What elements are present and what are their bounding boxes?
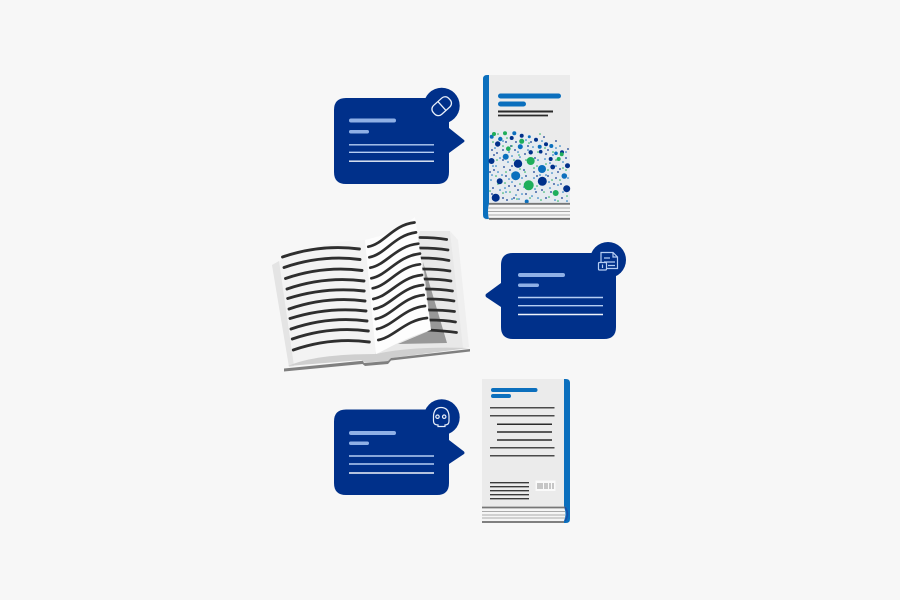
back cover text lines: [490, 408, 554, 456]
back cover pages: [482, 507, 568, 522]
icon: robot head: [434, 408, 449, 426]
book title bars: [498, 94, 561, 116]
callout: top with pill icon: [334, 88, 464, 184]
left page: [272, 240, 376, 367]
book pages: [488, 204, 570, 220]
book: bottom back cover: [482, 379, 570, 523]
book: top cover with dot pattern: [483, 75, 570, 220]
back cover title bars: [491, 388, 538, 398]
icon: pill: [430, 95, 454, 118]
open book: [272, 217, 470, 372]
back cover small print: [490, 483, 529, 499]
turning page: [365, 217, 431, 354]
icon: document: [598, 252, 618, 270]
callout: middle with document icon: [486, 242, 626, 339]
book cover bands: [288, 348, 469, 366]
page shadow: [398, 262, 447, 344]
left page text lines: [282, 248, 369, 350]
right page: [375, 231, 464, 354]
book cover strip: [284, 349, 470, 372]
dot pattern: [488, 130, 570, 204]
turning page text lines: [368, 222, 427, 340]
barcode: [536, 480, 556, 491]
callout: bottom with robot icon: [334, 399, 464, 495]
right page text lines: [420, 238, 456, 332]
